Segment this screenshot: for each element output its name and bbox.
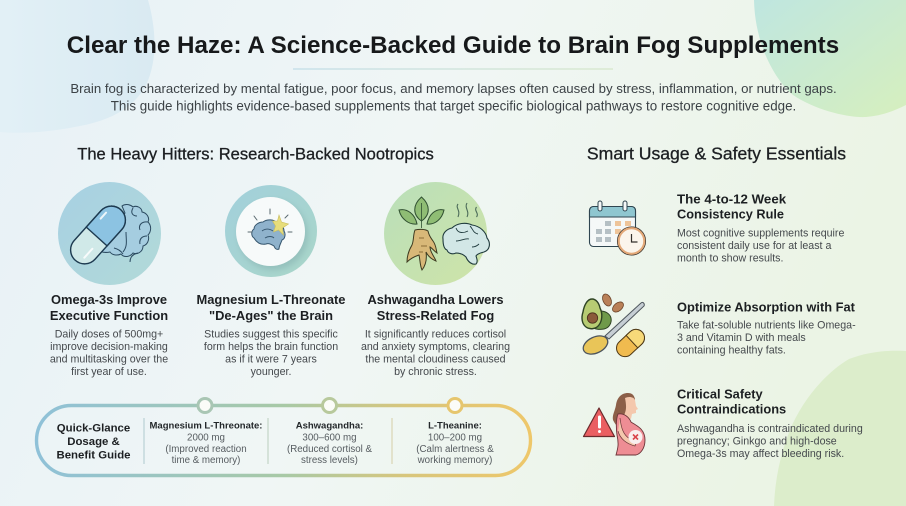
card body: as if it were 7 years (225, 354, 317, 366)
dosage: l-theanine: working memory) (417, 455, 492, 466)
icon: glowing brain (225, 185, 317, 277)
guide label: Dosage & (67, 436, 120, 448)
card body: by chronic stress. (394, 366, 477, 378)
card body (361, 328, 510, 378)
panel: absorption (580, 293, 856, 360)
guide label: Benefit Guide (56, 450, 131, 462)
icon: root and brain (384, 182, 489, 285)
text: absorption: Optimize Absorption with Fat (677, 300, 856, 314)
text: safety: Contraindications (677, 402, 786, 416)
card body: younger. (251, 366, 291, 378)
card body: first year of use. (71, 366, 147, 378)
text: absorption: Take fat-soluble nutrients like Omega- (677, 320, 856, 332)
card title: Omega-3s Improve (51, 292, 167, 307)
card body: It significantly reduces cortisol (365, 328, 506, 340)
dosage: l-theanine: L-Theanine: (428, 420, 482, 432)
card body: and anxiety symptoms, clearing (361, 341, 510, 353)
text: absorption: containing healthy fats. (677, 344, 786, 356)
text: absorption: 3 and Vitamin D with meals (677, 332, 806, 344)
panel: omega-3 (50, 182, 168, 378)
panel: omega-3: Executive Function (50, 308, 168, 323)
text: safety: Omega-3s may affect bleeding risk. (677, 448, 844, 460)
card body: Studies suggest this specific (204, 328, 339, 340)
intro text: Brain fog is characterized by mental fatigue, poor focus, and memory lapses often caused by stress, inflammation, or nutrient gaps. (70, 81, 837, 96)
text: consistency (677, 192, 844, 264)
panel: ashwagandha (361, 182, 510, 378)
card body: the mental cloudiness caused (365, 354, 506, 366)
panel: ashwagandha: Stress-Related Fog (377, 308, 494, 323)
icon: warning and pregnant figure (584, 393, 645, 455)
heading: heavy hitters: The Heavy Hitters: Research-Backed Nootropics (77, 144, 434, 164)
card body (204, 328, 339, 378)
node markers (198, 398, 462, 412)
card body: Daily doses of 500mg+ (55, 328, 163, 340)
icon: avocado, spoon, capsule (580, 293, 648, 360)
text: consistency: month to show results. (677, 252, 783, 264)
card body: improve decision-making (50, 341, 168, 353)
intro text (70, 81, 837, 114)
text: safety: Critical Safety (677, 386, 764, 402)
text: safety (677, 386, 863, 460)
heading: smart usage: Smart Usage & Safety Essentials (587, 144, 846, 164)
icon: capsule and brain (58, 182, 161, 285)
text: consistency: Most cognitive supplements require (677, 228, 844, 240)
dosage: magnesium (150, 420, 262, 466)
card title: Magnesium L-Threonate (197, 292, 345, 307)
text: consistency: Consistency Rule (677, 206, 784, 222)
panel: consistency rule (590, 192, 844, 264)
dosage: l-theanine (416, 420, 494, 466)
text: consistency: The 4-to-12 Week (677, 192, 787, 206)
card body: and multitasking over the (50, 354, 168, 366)
icon: calendar and clock (590, 201, 646, 255)
panel: magnesium (197, 185, 345, 378)
guide label: Quick-Glance (57, 422, 130, 434)
card body (50, 328, 168, 378)
text: safety: Ashwagandha is contraindicated during (677, 423, 863, 435)
dosage: l-theanine: (Calm alertness & (416, 444, 494, 455)
dosage: magnesium: Magnesium L-Threonate: (150, 420, 262, 432)
pill outline (36, 406, 530, 476)
dosage: ashwagandha: 300–600 mg (302, 432, 357, 444)
title: Clear the Haze: A Science-Backed Guide to Brain Fog Supplements (67, 32, 839, 59)
intro text: This guide highlights evidence-based supplements that target specific biological pathways to restore cognitive edge. (111, 98, 796, 114)
panel: dosage guide (36, 398, 530, 476)
dosage: ashwagandha: Ashwagandha: (296, 420, 363, 432)
card body: form helps the brain function (204, 341, 338, 353)
panel: safety (584, 386, 863, 460)
panel: magnesium: "De-Ages" the Brain (209, 308, 333, 323)
text: safety: pregnancy; Ginkgo and high-dose (677, 436, 837, 448)
card title: Ashwagandha Lowers (367, 292, 504, 307)
text: absorption (677, 300, 856, 356)
dosage: l-theanine: 100–200 mg (428, 432, 482, 444)
dosage: ashwagandha: (Reduced cortisol & (287, 444, 373, 455)
dosage: ashwagandha: stress levels) (301, 455, 358, 466)
dosage: magnesium: time & memory) (172, 455, 240, 466)
dosage: magnesium: 2000 mg (187, 432, 225, 444)
guide label (56, 422, 131, 462)
dosage: magnesium: (Improved reaction (165, 444, 247, 455)
text: consistency: consistent daily use for at least a (677, 240, 831, 252)
dosage: ashwagandha (287, 420, 373, 466)
